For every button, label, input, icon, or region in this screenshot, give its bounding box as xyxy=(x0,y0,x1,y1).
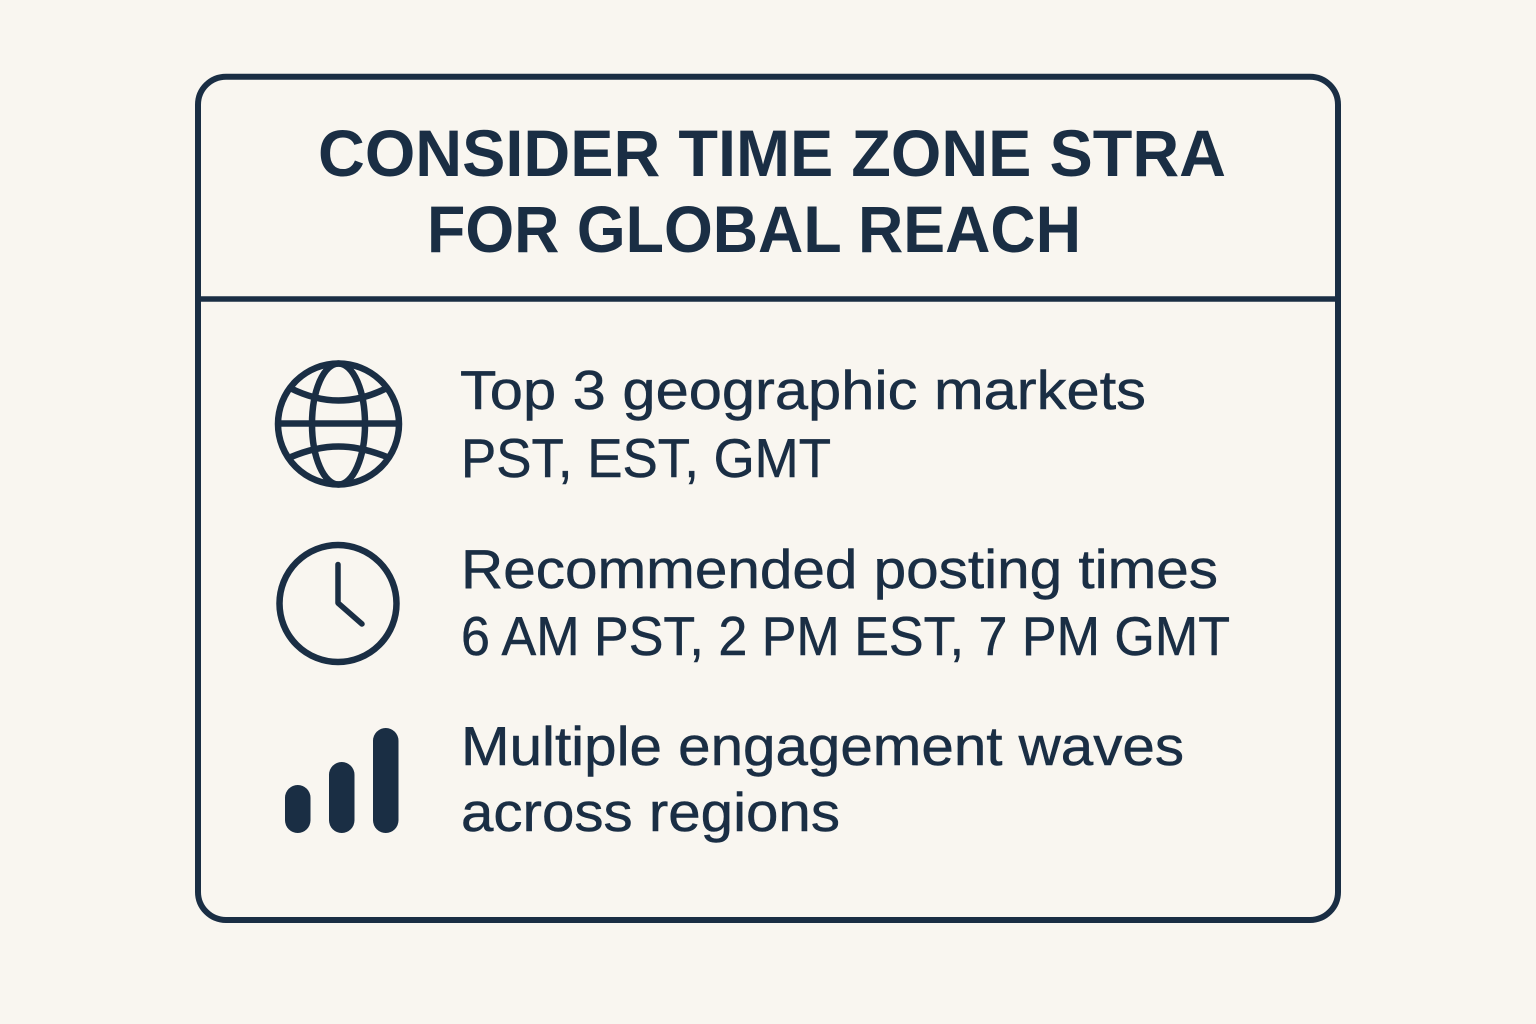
text: engagement waves: Multiple engagement waves xyxy=(461,715,1184,777)
text: posting times xyxy=(461,538,1230,667)
text: engagement waves xyxy=(461,715,1184,843)
text: posting times: 6 AM PST, 2 PM EST, 7 PM GMT xyxy=(461,605,1230,667)
text: geographic markets: Top 3 geographic markets xyxy=(460,359,1146,421)
text: geographic markets xyxy=(460,359,1146,489)
text: posting times: Recommended posting times xyxy=(461,538,1218,600)
icon: clock xyxy=(280,545,396,662)
title: CONSIDER TIME ZONE STRA xyxy=(318,116,1226,190)
icon: globe xyxy=(278,364,399,484)
title xyxy=(318,116,1226,266)
text: engagement waves: across regions xyxy=(461,781,840,843)
text: geographic markets: PST, EST, GMT xyxy=(461,427,831,489)
panel: card outline xyxy=(198,77,1338,920)
title: FOR GLOBAL REACH xyxy=(427,192,1081,266)
icon: bar chart xyxy=(285,728,398,833)
